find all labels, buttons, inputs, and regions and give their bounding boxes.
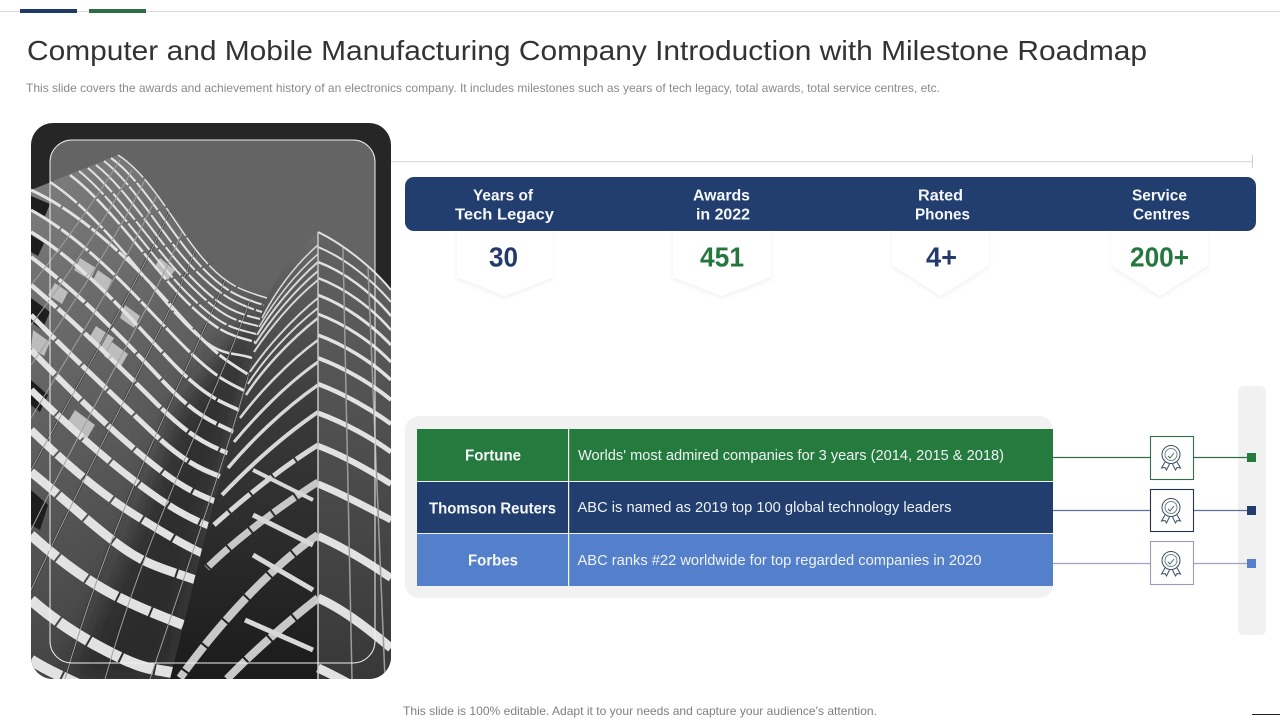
value card: 4+ [892, 225, 989, 296]
row: Thomson Reuters: Thomson Reuters [429, 500, 556, 518]
row: Forbes: ABC ranks #22 worldwide for top regarded companies in 2020 [578, 553, 982, 569]
label: awards in 2022: Awards [693, 188, 750, 204]
awards table panel [405, 416, 1053, 598]
top rule with accent bars [0, 9, 1280, 13]
row: Thomson Reuters [417, 482, 1053, 533]
footer note: This slide is 100% editable. Adapt it to your needs and capture your audience's attention. [403, 704, 877, 718]
row: Thomson Reuters: ABC is named as 2019 top 100 global technology leaders [578, 500, 952, 516]
icon: award ribbon [1162, 446, 1180, 470]
row: Forbes [417, 534, 1053, 586]
label: service centres: Service [1132, 188, 1187, 204]
label: years of tech legacy: Years of [473, 188, 534, 204]
value card: 451: 451 [700, 242, 744, 272]
subtitle: This slide covers the awards and achievement history of an electronics company. It includes milestones such as years of tech legacy, total awards, total service centres, etc. [26, 81, 940, 95]
value card: 200+ [1111, 225, 1208, 296]
row: Fortune [417, 429, 1053, 481]
label: awards in 2022: in 2022 [696, 206, 750, 224]
label: rated phones: Phones [915, 206, 970, 224]
connector rule above metrics [391, 155, 1253, 168]
left tower mullions, dark [31, 210, 258, 679]
side rail [1238, 386, 1266, 635]
value card: 30 [457, 225, 553, 296]
label: years of tech legacy: Tech Legacy [455, 206, 554, 224]
milestone: lavender connector, badge and marker [1053, 542, 1256, 584]
photo: skyscraper in black and white [31, 123, 391, 692]
left tower floors [31, 155, 267, 690]
right tower right face [318, 274, 391, 679]
row: Fortune: Worlds' most admired companies for 3 years (2014, 2015 & 2018) [578, 448, 1004, 464]
label: service centres: Centres [1133, 206, 1190, 224]
value card: 451 [673, 225, 771, 296]
photo inner frame [50, 140, 375, 663]
row: Forbes: Forbes [468, 552, 518, 570]
corner rule [1252, 714, 1280, 715]
value card: 200+: 200+ [1130, 242, 1189, 272]
milestone: navy connector, badge and marker [1053, 490, 1256, 532]
value card: 30: 30 [489, 242, 518, 272]
right tower left face [170, 284, 318, 679]
milestone: green connector, badge and marker [1053, 436, 1256, 480]
value card: 4+: 4+ [926, 242, 957, 272]
label: rated phones: Rated [918, 188, 963, 204]
icon: award ribbon [1162, 552, 1180, 576]
icon: award ribbon [1162, 498, 1180, 523]
row: Fortune: Fortune [465, 448, 521, 464]
title: Computer and Mobile Manufacturing Company Introduction with Milestone Roadmap [27, 35, 1147, 66]
left tower mullions [31, 160, 258, 679]
metric header band [405, 177, 1256, 231]
